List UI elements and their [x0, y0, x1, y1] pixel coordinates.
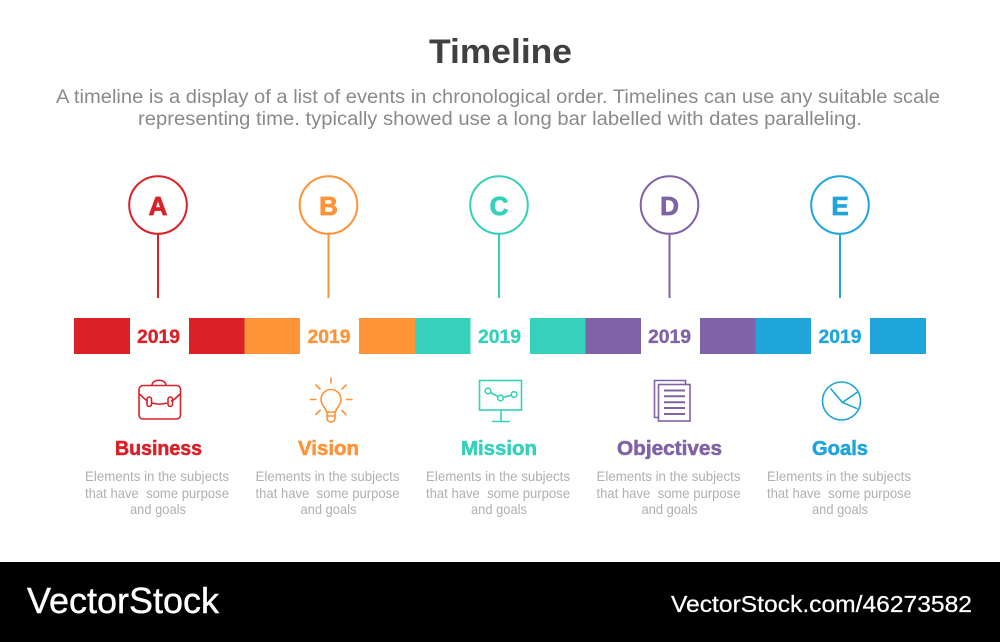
column A: Business: [85, 176, 229, 517]
description D: [596, 468, 741, 517]
year E: 2019: [818, 327, 862, 348]
description B: and goals: [300, 501, 356, 517]
column D: Objectives: [596, 176, 741, 517]
description E: that have some purpose: [767, 485, 911, 501]
marker E: E: [831, 191, 849, 221]
description B: that have some purpose: [256, 485, 400, 501]
description B: [256, 468, 400, 517]
description C: and goals: [471, 501, 527, 517]
description A: [85, 468, 229, 517]
subtitle text: representing time. typically showed use a long bar labelled with dates paralleling.: [138, 109, 862, 130]
year B: 2019: [308, 327, 350, 348]
marker D: D: [660, 191, 679, 221]
description B: Elements in the subjects: [256, 468, 400, 484]
footer band: [0, 562, 1000, 642]
description C: [426, 468, 570, 517]
timeline bar: [74, 318, 926, 354]
description D: that have some purpose: [596, 485, 741, 501]
label Business: Business: [115, 438, 202, 460]
description A: that have some purpose: [85, 485, 229, 501]
label Mission: Mission: [461, 438, 537, 460]
marker A: [129, 176, 187, 298]
description A: Elements in the subjects: [85, 468, 229, 484]
subtitle text: A timeline is a display of a list of events in chronological order. Timelines can use any suitable scale: [56, 87, 940, 108]
subtitle text: [56, 87, 940, 130]
description C: Elements in the subjects: [426, 468, 570, 484]
marker A: A: [149, 191, 168, 221]
icon: briefcase: [139, 380, 180, 419]
marker C: C: [490, 191, 509, 221]
marker E: [811, 176, 869, 298]
marker B: [300, 176, 357, 298]
label Objectives: Objectives: [617, 438, 722, 460]
label Vision: Vision: [298, 438, 359, 460]
year C: 2019: [478, 327, 521, 348]
icon: light bulb: [310, 378, 352, 422]
year A: 2019: [137, 327, 180, 348]
footer logo: VectorStock: [27, 580, 220, 621]
marker D: [641, 176, 698, 298]
description E: and goals: [812, 501, 868, 517]
marker C: [470, 176, 528, 298]
footer url: VectorStock.com/46273582: [671, 591, 972, 617]
label Goals: Goals: [812, 438, 868, 460]
description E: [767, 468, 911, 517]
year D: 2019: [648, 327, 691, 348]
title: Timeline: [429, 33, 572, 71]
description A: and goals: [130, 501, 186, 517]
column E: Goals: [767, 176, 911, 517]
description D: and goals: [642, 501, 698, 517]
column B: Vision: [256, 176, 400, 517]
marker B: B: [319, 191, 338, 221]
description D: Elements in the subjects: [596, 468, 740, 484]
column C: Mission: [426, 176, 570, 517]
description E: Elements in the subjects: [767, 468, 911, 484]
description C: that have some purpose: [426, 485, 570, 501]
icon: documents: [654, 380, 690, 421]
icon: pie chart: [822, 382, 860, 420]
icon: presentation screen: [480, 380, 522, 422]
